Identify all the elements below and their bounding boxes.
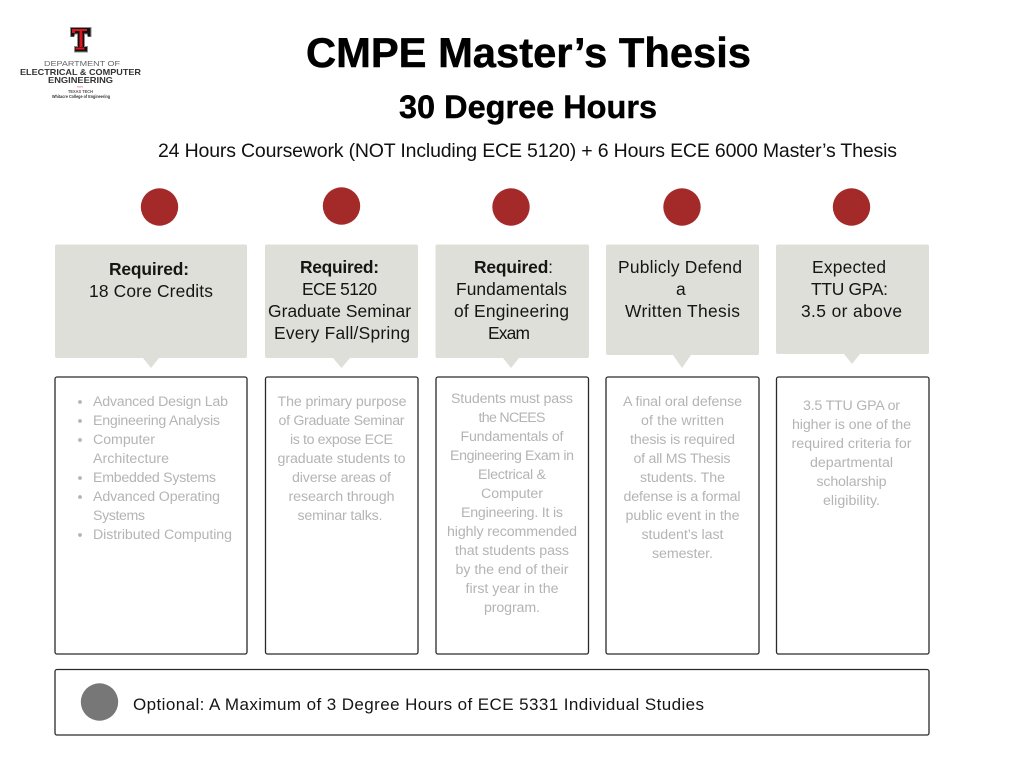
body box: exam description: that students pass <box>455 543 569 559</box>
body box: defense description: defense is a formal <box>624 489 740 505</box>
body box: defense description: of all MS Thesis <box>634 451 730 467</box>
header: required ECE 5120: ECE 5120 <box>302 279 377 299</box>
body box: exam description: the NCEES <box>478 410 546 426</box>
logo text: DEPARTMENT OF <box>44 59 120 68</box>
panel: GPA expectation <box>776 188 929 654</box>
body box: GPA description: departmental <box>810 455 893 471</box>
header: expected GPA: 3.5 or above <box>801 301 902 321</box>
panel: fundamentals of engineering exam <box>436 188 589 654</box>
body box: seminar description: diverse areas of <box>292 470 391 486</box>
body box: exam description: Engineering. It is <box>461 505 563 521</box>
body box: exam description: Students must pass <box>451 391 573 407</box>
body box: GPA description: required criteria for <box>792 436 912 452</box>
header: required FE exam <box>436 244 589 368</box>
header: required FE exam: Fundamentals <box>456 279 567 299</box>
body box: core course list: Engineering Analysis <box>93 413 220 429</box>
logo: Department of Electrical & Computer Engineering <box>20 27 141 99</box>
body box: exam description: program. <box>484 600 540 616</box>
body box: seminar description: The primary purpose <box>278 394 407 410</box>
body box: core course list: Architecture <box>93 451 169 467</box>
header: required ECE 5120: Graduate Seminar <box>268 301 411 321</box>
body box: seminar description: seminar talks. <box>298 508 382 524</box>
body box: exam description: by the end of their <box>456 562 569 578</box>
panel: graduate seminar <box>265 187 418 654</box>
icon: red circle 5 <box>833 188 870 226</box>
body box: GPA description: higher is one of the <box>792 417 911 433</box>
body box: seminar description: is to expose ECE <box>290 432 393 448</box>
header: expected GPA <box>776 244 929 364</box>
body box: defense description <box>606 377 759 654</box>
body box: exam description: Electrical & <box>478 467 547 483</box>
subtitle: degree hours: 30 Degree Hours <box>399 89 657 125</box>
logo text: ELECTRICAL & COMPUTER <box>20 67 141 77</box>
body box: seminar description: graduate students to <box>278 451 406 467</box>
body box: exam description: highly recommended <box>447 524 577 540</box>
optional note: Optional: A Maximum of 3 Degree Hours of ECE 5331 Individual Studies <box>133 695 704 714</box>
header: required FE exam: Required: <box>474 257 553 277</box>
header: required ECE 5120 <box>265 244 418 368</box>
body box: seminar description <box>266 377 418 654</box>
header: required core credits <box>55 244 247 368</box>
logo text: Whitacre College of Engineering <box>52 94 110 99</box>
icon: red circle 2 <box>323 187 360 225</box>
body box: defense description: students. The <box>640 470 725 486</box>
header: expected GPA: TTU GPA: <box>811 279 888 299</box>
header: publicly defend thesis <box>606 244 759 368</box>
body box: core course list: Advanced Design Lab <box>93 394 228 410</box>
body box: GPA description: eligibility. <box>823 493 880 509</box>
body box: exam description: Engineering Exam in <box>450 448 574 464</box>
body box: defense description: of the written <box>641 413 724 429</box>
header: required FE exam: of Engineering <box>454 301 569 321</box>
header: required FE exam: Exam <box>488 323 530 343</box>
body box: exam description: Computer <box>481 486 543 502</box>
logo text: ENGINEERING <box>48 75 113 85</box>
header: required ECE 5120: Required: <box>300 257 379 277</box>
body box: core course list: Embedded Systems <box>93 470 216 486</box>
panel: thesis defense <box>606 188 759 654</box>
title: CMPE Master’s Thesis <box>306 29 751 76</box>
header: expected GPA: Expected <box>812 257 886 277</box>
icon: gray circle <box>81 683 118 721</box>
body box: exam description <box>436 377 588 654</box>
body box: exam description: Fundamentals of <box>460 429 564 445</box>
requirement summary line: 24 Hours Coursework (NOT Including ECE 5120) + 6 Hours ECE 6000 Master’s Thesis <box>158 140 897 162</box>
header: publicly defend thesis: a <box>676 279 686 299</box>
body box: defense description: student’s last <box>642 527 724 543</box>
body box: GPA description: scholarship <box>816 474 887 490</box>
logo text: TEXAS TECH <box>68 89 93 94</box>
header: required core credits: 18 Core Credits <box>89 281 213 301</box>
body box: exam description: first year in the <box>466 581 559 597</box>
body box: core course list: Systems <box>93 508 145 524</box>
body box: core course list <box>55 377 247 654</box>
body box: core course list: Advanced Operating <box>93 489 220 505</box>
body box: seminar description: of Graduate Seminar <box>278 413 405 429</box>
body box: defense description: thesis is required <box>630 432 735 448</box>
body box: core course list: Distributed Computing <box>93 527 232 543</box>
header: required ECE 5120: Every Fall/Spring <box>274 323 410 343</box>
body box: defense description: public event in the <box>626 508 740 524</box>
logo text <box>20 59 141 99</box>
header: required core credits: Required: <box>109 259 189 279</box>
icon: red circle 1 <box>141 188 178 226</box>
panel: optional individual studies <box>55 670 929 735</box>
icon: double T emblem <box>70 27 92 52</box>
body box: GPA description: 3.5 TTU GPA or <box>803 398 900 414</box>
panel: core credits <box>55 188 247 654</box>
header: publicly defend thesis: Publicly Defend <box>618 257 742 277</box>
body box: defense description: A final oral defense <box>623 394 742 410</box>
body box: core course list: Computer <box>93 432 155 448</box>
body box: defense description: semester. <box>652 546 713 562</box>
header: publicly defend thesis: Written Thesis <box>625 301 740 321</box>
body box: seminar description: research through <box>288 489 394 505</box>
icon: red circle 3 <box>492 188 530 226</box>
body box: GPA description <box>776 377 929 654</box>
icon: red circle 4 <box>663 188 701 226</box>
